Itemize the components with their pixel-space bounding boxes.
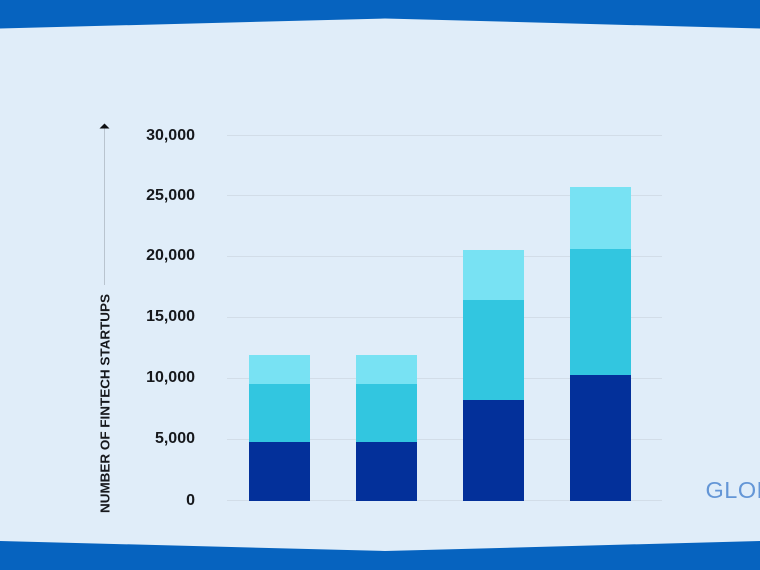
top banner <box>0 0 760 28</box>
y-axis labels: 20,000 <box>146 247 195 264</box>
bar 4 <box>570 187 631 501</box>
y-axis labels: 5,000 <box>155 430 195 447</box>
y-axis labels <box>146 127 195 509</box>
y-axis labels: 30,000 <box>146 127 195 144</box>
bar 1 <box>249 355 310 501</box>
y-axis labels: 15,000 <box>146 308 195 325</box>
y-axis arrow <box>100 124 110 285</box>
y-axis title: NUMBER OF FINTECH STARTUPS <box>98 294 112 513</box>
bar 2 <box>356 355 417 501</box>
bar 3 <box>463 250 524 501</box>
bottom banner <box>0 541 760 570</box>
y-axis labels: 25,000 <box>146 187 195 204</box>
y-axis labels: 0 <box>186 492 195 509</box>
y-axis labels: 10,000 <box>146 369 195 386</box>
